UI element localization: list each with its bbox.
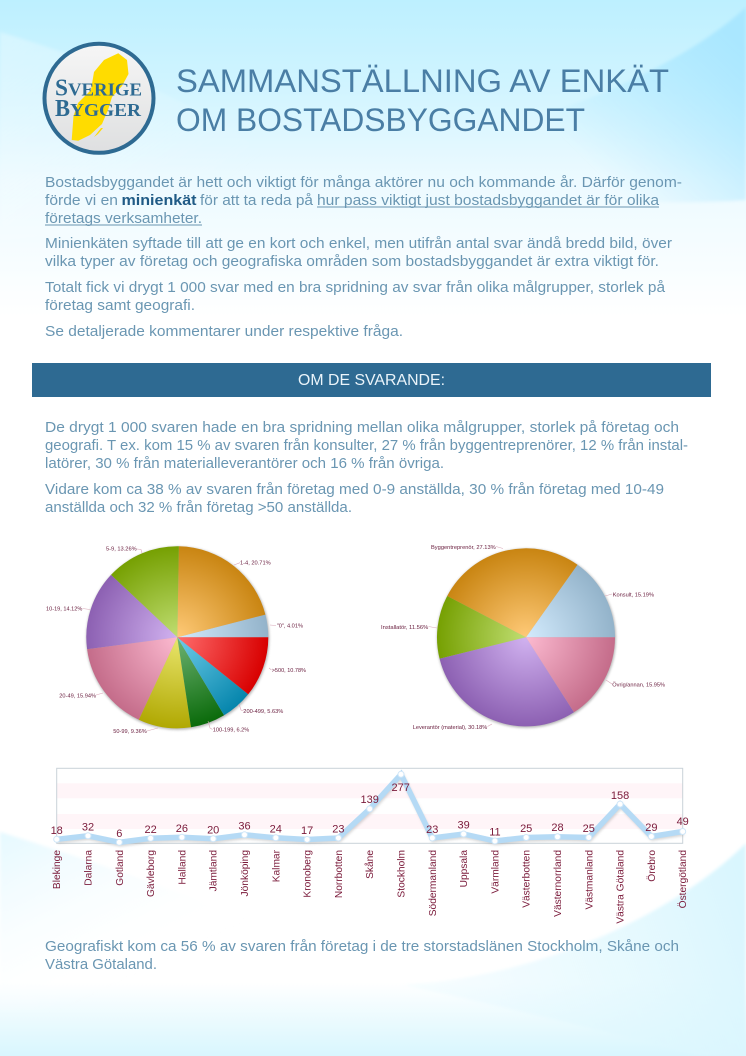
pie chart: company type: Konsult, 15.19% <box>613 592 654 598</box>
county axis labels: Örebro <box>646 850 658 882</box>
data values: 29 <box>645 822 658 834</box>
pie chart: company size: "0", 4.01% <box>277 624 303 630</box>
title: OM BOSTADSBYGGANDET <box>176 102 585 138</box>
pie chart: company size: 50-99, 9.36% <box>113 729 147 735</box>
intro text block: Totalt fick vi drygt 1 000 svar med en bra spridning av svar från olika målgrupper, storlek på <box>45 279 666 296</box>
respondents text block: De drygt 1 000 svaren hade en bra spridning mellan olika målgrupper, storlek på företag och <box>45 419 679 436</box>
pie chart: company size <box>46 546 306 735</box>
county axis labels: Västerbotten <box>522 850 533 908</box>
data values: 25 <box>520 823 532 835</box>
logo wordmark <box>55 76 142 122</box>
pie chart: company size: 20-49, 15.94% <box>59 693 96 699</box>
county axis labels: Västmanland <box>584 850 595 909</box>
intro text block: Bostadsbyggandet är hett och viktigt för många aktörer nu och kommande år. Därför genom- <box>45 174 682 191</box>
county axis labels: Västra Götaland <box>616 850 627 924</box>
logo wordmark: YGGER <box>70 100 142 120</box>
intro text block: förde vi en <box>45 192 118 209</box>
data values <box>51 782 689 840</box>
title <box>176 63 669 138</box>
respondents text block <box>45 419 688 516</box>
county axis labels: Södermanland <box>428 850 439 916</box>
logo: Sverige Bygger <box>44 44 154 153</box>
data values: 22 <box>144 824 157 836</box>
data values: 277 <box>392 782 410 794</box>
data values: 158 <box>611 790 629 802</box>
data values: 49 <box>677 816 689 828</box>
county axis labels <box>52 849 689 924</box>
intro text block: minienkät <box>122 192 196 209</box>
pie chart: company type: Byggentreprenör, 27.13% <box>431 545 496 551</box>
data values: 24 <box>270 824 282 836</box>
county axis labels: Blekinge <box>52 850 63 889</box>
geography text block: Geografiskt kom ca 56 % av svaren från företag i de tre storstadslänen Stockholm, Skåne och <box>45 938 679 955</box>
data points <box>54 771 686 845</box>
data values: 36 <box>238 820 251 832</box>
data values: 25 <box>583 823 595 835</box>
county axis labels: Skåne <box>364 850 376 879</box>
pie chart: company type: Installatör, 11.56% <box>381 625 428 631</box>
data values: 23 <box>332 824 345 836</box>
title: SAMMANSTÄLLNING AV ENKÄT <box>176 63 669 99</box>
data values: 39 <box>457 820 470 832</box>
county axis labels: Gävleborg <box>146 850 157 897</box>
geography text block: Västra Götaland. <box>45 956 157 973</box>
line chart: responses per county <box>51 768 689 924</box>
pie chart: company size: 10-19, 14.12% <box>46 607 82 613</box>
intro text block: företag samt geografi. <box>45 297 195 314</box>
section header bar <box>32 363 711 397</box>
pie chart: company type: Övrig/annan, 15.95% <box>612 681 665 688</box>
county axis labels: Östergötland <box>677 850 689 908</box>
data values: 6 <box>116 828 122 840</box>
pie chart: company size: >500, 10.78% <box>272 668 306 674</box>
data values: 28 <box>551 822 564 834</box>
data values: 11 <box>489 826 501 838</box>
county axis labels: Kronoberg <box>303 850 314 898</box>
county axis labels: Kalmar <box>271 849 282 882</box>
data values: 20 <box>207 824 219 836</box>
geography text block <box>45 938 679 973</box>
data values: 17 <box>301 825 313 837</box>
county axis labels: Dalarna <box>84 850 94 886</box>
county axis labels: Gotland <box>115 850 126 886</box>
county axis labels: Västernorrland <box>553 850 564 917</box>
intro text block: Minienkäten syftade till att ge en kort och enkel, men utifrån antal svar ändå bredd bild, över <box>45 235 672 252</box>
intro text block: Se detaljerade kommentarer under respektive fråga. <box>45 323 403 340</box>
logo wordmark: S <box>55 76 68 102</box>
county axis labels: Jämtland <box>209 850 220 891</box>
intro text block: hur pass viktigt just bostadsbyggandet är för olika <box>317 192 660 209</box>
pie chart: company type: Leverantör (material), 30.18% <box>413 725 487 731</box>
logo wordmark: B <box>55 96 70 122</box>
county axis labels: Halland <box>177 850 188 885</box>
section header bar: OM DE SVARANDE: <box>298 372 445 389</box>
county axis labels: Värmland <box>490 850 501 894</box>
pie chart: company size: 5-9, 13.26% <box>106 547 137 553</box>
respondents text block: Vidare kom ca 38 % av svaren från företag med 0-9 anställda, 30 % från företag med 10-49 <box>45 481 664 498</box>
data values: 18 <box>51 825 63 837</box>
intro text block: för att ta reda på <box>200 192 314 209</box>
data values: 26 <box>176 823 188 835</box>
icon: map of Sweden <box>72 53 128 141</box>
county axis labels: Uppsala <box>459 850 470 887</box>
pie chart: company type <box>381 545 665 731</box>
county axis labels: Jönköping <box>240 850 251 896</box>
logo wordmark: VERIGE <box>68 80 142 100</box>
intro text block <box>45 174 682 340</box>
pie chart: company size: 100-199, 6.2% <box>213 728 249 734</box>
county axis labels: Stockholm <box>396 850 408 898</box>
respondents text block: anställda och 32 % från företag >50 anställda. <box>45 499 352 516</box>
data values: 23 <box>426 824 438 836</box>
intro text block: vilka typer av företag och geografiska områden som bostadsbyggandet är extra viktigt för. <box>45 253 659 270</box>
intro text block: företags verksamheter. <box>45 210 202 227</box>
data values: 32 <box>82 822 94 834</box>
respondents text block: geografi. T ex. kom 15 % av svaren från konsulter, 27 % från byggentreprenörer, 12 % från instal- <box>45 437 688 454</box>
county axis labels: Norrbotten <box>334 850 345 898</box>
respondents text block: latörer, 30 % från materialleverantörer och 16 % från övriga. <box>45 455 444 472</box>
data values: 139 <box>361 794 379 806</box>
pie chart: company size: 200-499, 5.63% <box>243 709 283 715</box>
pie chart: company size: 1-4, 20.71% <box>240 561 271 567</box>
